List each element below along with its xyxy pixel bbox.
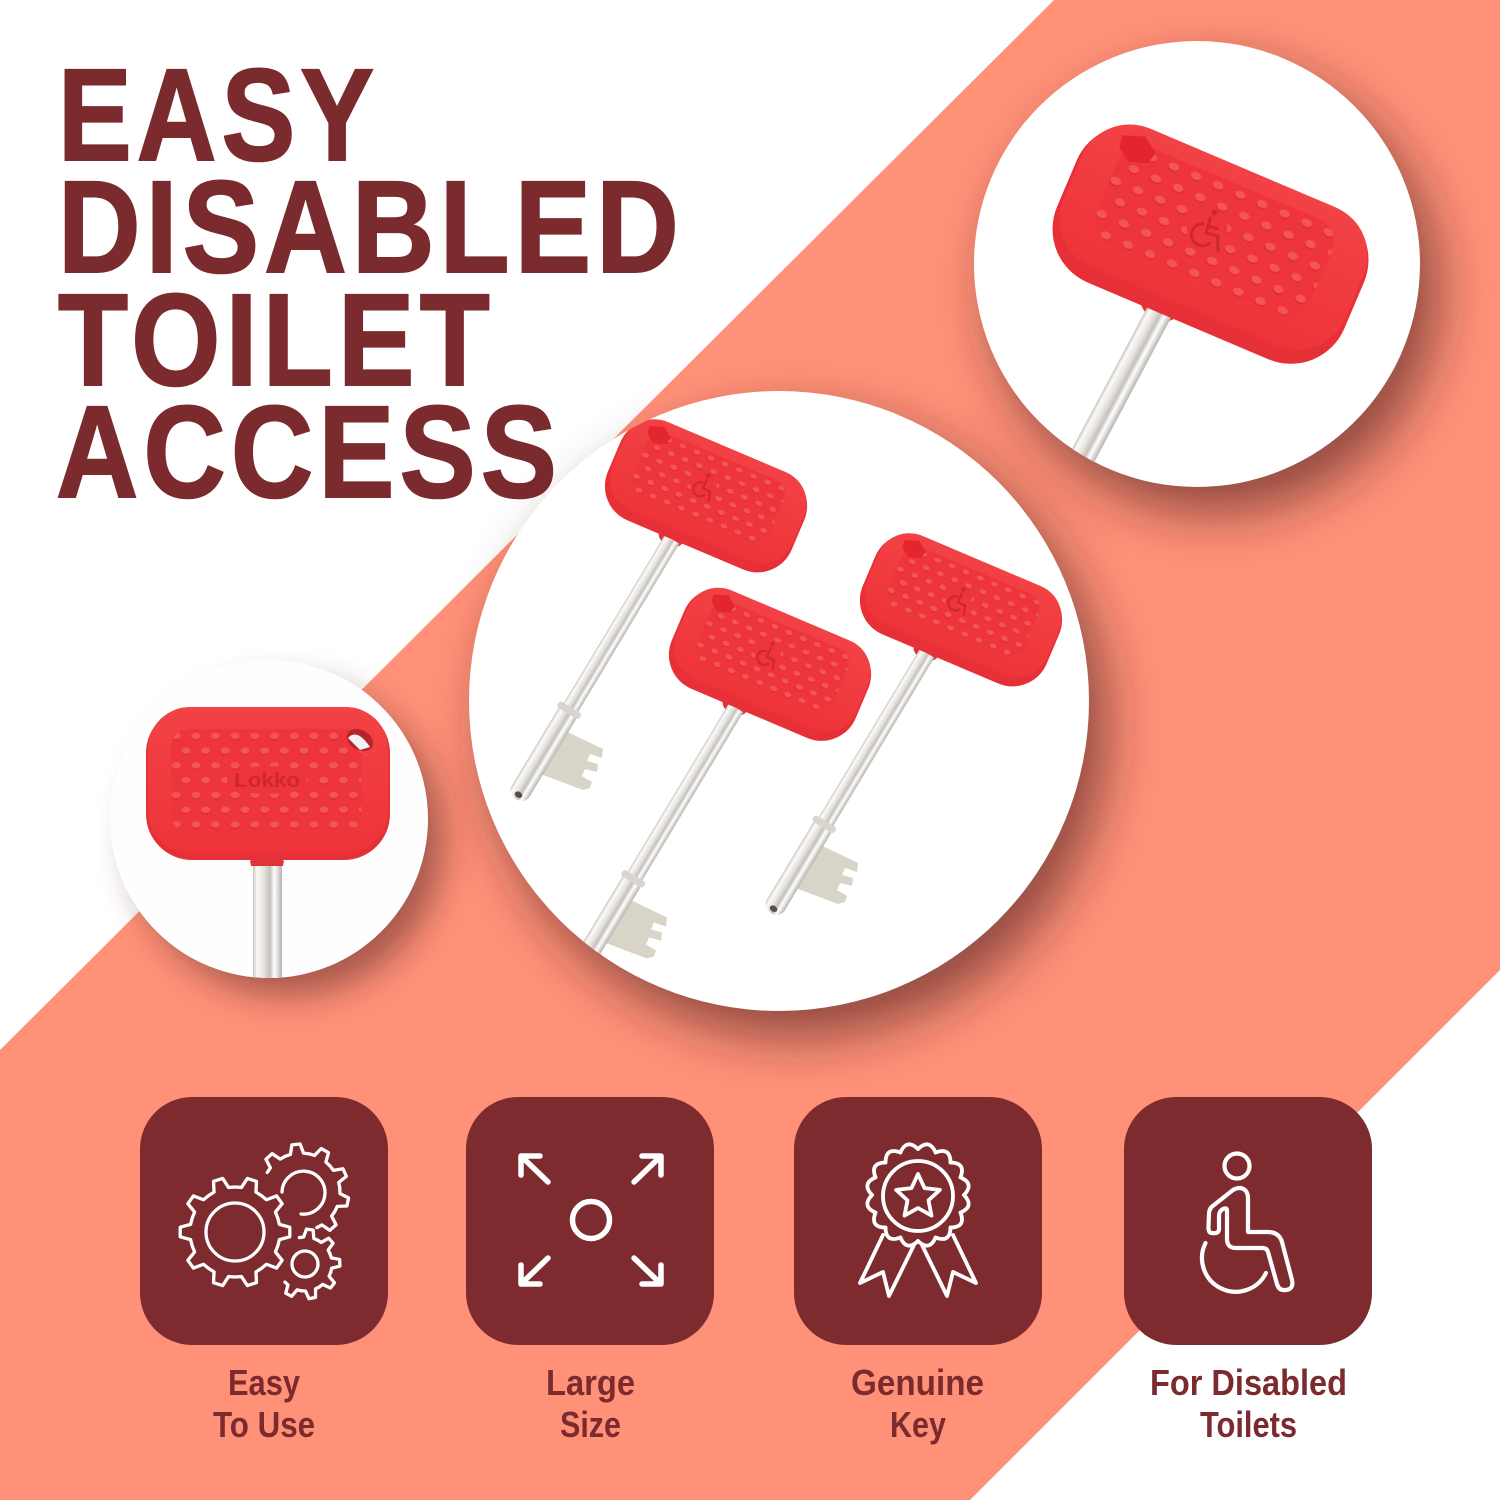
icon: wheelchair user [1202,1154,1292,1292]
title [56,41,684,525]
title: EASY [58,41,379,188]
label: large size [546,1362,635,1445]
label: for disabled toilets [1150,1362,1347,1445]
label: large size: Size [560,1404,621,1445]
icon tile: easy to use (gears) [140,1097,388,1345]
icon tile: for disabled toilets (wheelchair) [1124,1097,1372,1345]
panel: three keys main image [469,391,1107,1037]
label: genuine key: Genuine [851,1362,984,1403]
panel: left key close-up with Lokko branding [110,660,443,995]
title: ACCESS [56,378,562,525]
key one [505,408,819,806]
label: easy to use: Easy [228,1362,300,1403]
label: easy to use: To Use [213,1404,315,1445]
icon: award rosette [860,1143,976,1296]
label: genuine key [851,1362,984,1445]
title: TOILET [58,266,495,413]
icon tile: genuine key (award rosette) [794,1097,1042,1345]
icon: gears [180,1143,350,1300]
label: genuine key: Key [890,1404,946,1445]
label: for disabled toilets: For Disabled [1150,1362,1347,1403]
key three [760,522,1074,920]
label: large size: Large [546,1362,635,1403]
title: DISABLED [58,153,684,300]
label: for disabled toilets: Toilets [1200,1404,1297,1445]
label: easy to use [213,1362,315,1445]
icon tile: large size (arrows) [466,1097,714,1345]
key two [584,588,872,958]
panel: top right key close-up [974,41,1438,513]
icon: expand arrows [521,1156,661,1284]
panel: left key close-up with Lokko branding: Lokko [234,770,300,792]
